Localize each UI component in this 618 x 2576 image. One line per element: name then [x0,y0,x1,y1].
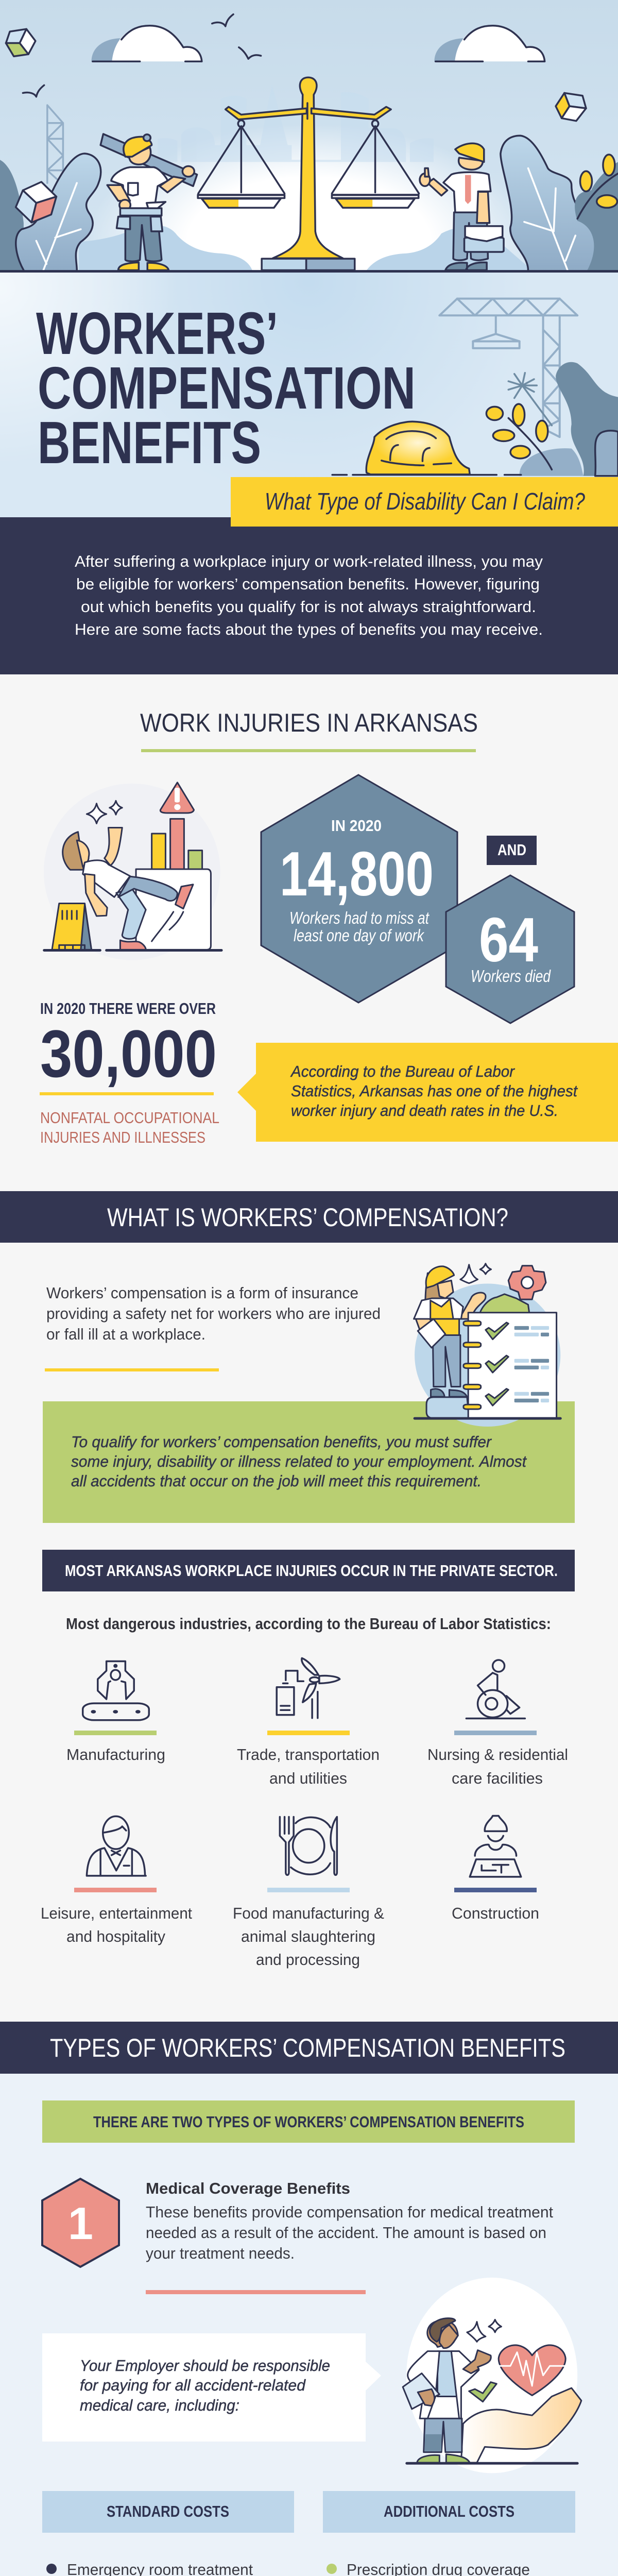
callout: employer responsibility: medical care, including: [80,2396,239,2414]
title: WORKERS’ [36,300,278,367]
definition paragraph: or fall ill at a workplace. [46,1325,205,1343]
green banner: two types [42,2100,575,2143]
green qualification box: some injury, disability or illness related to your employment. Almost [71,1452,527,1470]
green qualification box: all accidents that occur on the job will meet this requirement. [71,1472,482,1490]
stat hexagon: 14,800: 14,800 [280,839,434,909]
hero illustration: scales of justice and workers [0,0,618,361]
industry: leisure, entertainment and hospitality [41,1816,192,1945]
subtitle banner [231,477,618,527]
intro panel: Here are some facts about the types of benefits you may receive. [75,620,543,638]
section band: types of benefits [0,2022,618,2074]
industry: food manufacturing [233,1817,384,1969]
badge 1 [42,2179,119,2267]
heading: work injuries in Arkansas: WORK INJURIES IN ARKANSAS [140,708,478,737]
stat: 30,000 injuries and illnesses: 30,000 [40,1016,217,1091]
text: medical coverage benefits: These benefits provide compensation for medical treatment [146,2203,553,2221]
industry: nursing and residential care [427,1660,568,1787]
text: medical coverage benefits [146,2179,553,2294]
intro panel: out which benefits you qualify for is not always straightforward. [81,598,536,616]
industry: nursing and residential care: care facilities [452,1769,543,1787]
industry: manufacturing: Manufacturing [66,1745,165,1764]
callout: employer responsibility [42,2333,381,2442]
title [36,300,416,476]
industry: leisure, entertainment and hospitality: Leisure, entertainment [41,1904,192,1922]
icon: engineer with blueprint [470,1816,521,1877]
AND badge [487,836,537,865]
intro panel: After suffering a workplace injury or work-related illness, you may [75,552,543,570]
text: medical coverage benefits: Medical Coverage Benefits [146,2179,350,2197]
stat: 30,000 injuries and illnesses: INJURIES AND ILLNESSES [40,1128,205,1146]
callout: employer responsibility: Your Employer should be responsible [80,2357,330,2375]
title: BENEFITS [38,409,261,476]
industry: trade, transportation and utilities [237,1658,380,1787]
industry: trade, transportation and utilities: Trade, transportation [237,1745,380,1764]
stat hexagon: 14,800: least one day of work [294,926,424,945]
callout: Bureau of Labor Statistics: Statistics, Arkansas has one of the highest [291,1082,578,1100]
definition paragraph: Workers’ compensation is a form of insurance [46,1284,358,1302]
intro panel: be eligible for workers’ compensation benefits. However, figuring [76,575,540,593]
stat hexagon: 64: Workers died [471,967,551,986]
illustration: worker with checklist [414,1264,560,1427]
stat hexagon: 14,800 [261,775,457,1003]
stat: 30,000 injuries and illnesses: IN 2020 THERE WERE OVER [40,999,216,1018]
callout: employer responsibility: for paying for all accident-related [80,2376,306,2394]
heading: work injuries in Arkansas [140,708,478,752]
industry: food manufacturing: Food manufacturing & [233,1904,384,1922]
icon: robotic claw on conveyor [83,1661,149,1720]
icon: plate, fork and knife [280,1817,337,1875]
panel: standard costs: STANDARD COSTS [107,2502,229,2520]
illustration: doctor with heart and hand [403,2278,581,2473]
industry: nursing and residential care: Nursing & residential [427,1745,568,1764]
under-ground title background with crane, helmet and plants [0,273,618,518]
industry: trade, transportation and utilities: and utilities [269,1769,347,1787]
stat: 30,000 injuries and illnesses: NONFATAL OCCUPATIONAL [40,1109,219,1127]
industry: leisure, entertainment and hospitality: and hospitality [66,1927,165,1945]
callout: Bureau of Labor Statistics [237,1043,618,1142]
illustration: falling worker [44,783,221,960]
industry: construction: Construction [452,1904,539,1922]
stat hexagon: 14,800: Workers had to miss at [289,908,430,927]
green qualification box [43,1401,575,1523]
subheading: most dangerous industries: Most dangerous industries, according to the Bureau of Labor Statistics: [66,1615,551,1633]
callout: Bureau of Labor Statistics: worker injury and death rates in the U.S. [291,1101,558,1120]
badge 1: 1 [68,2198,93,2249]
section background: medical benefits [0,2073,618,2576]
industry: manufacturing [66,1661,165,1764]
stat: 30,000 injuries and illnesses [40,999,219,1146]
industry: food manufacturing: animal slaughtering [241,1927,375,1945]
panel: standard costs [42,2491,294,2576]
green qualification box: To qualify for workers’ compensation benefits, you must suffer [71,1433,492,1451]
stat hexagon: 64 [446,875,574,1023]
definition paragraph: providing a safety net for workers who are injured [46,1304,381,1323]
stat hexagon: 64: 64 [479,905,538,975]
intro panel [0,517,618,674]
title: COMPENSATION [38,354,416,421]
stat hexagon: 14,800: IN 2020 [331,817,382,835]
industry: food manufacturing: and processing [256,1951,360,1969]
panel: additional costs [323,2491,575,2576]
AND badge: AND [497,841,526,859]
callout: Bureau of Labor Statistics: According to the Bureau of Labor [290,1062,516,1080]
icon: wind turbine and battery [277,1658,340,1718]
icon: wheelchair user [466,1660,525,1719]
industry: construction [452,1816,539,1922]
banner: private sector [42,1550,575,1591]
definition paragraph [45,1284,381,1371]
green banner: two types: THERE ARE TWO TYPES OF WORKERS’ COMPENSATION BENEFITS [93,2113,524,2131]
text: medical coverage benefits: needed as a result of the accident. The amount is based on [146,2224,546,2242]
icon: waiter with bow tie [87,1816,146,1876]
text: medical coverage benefits: your treatment needs. [146,2244,295,2262]
section band: what is workers' compensation [0,1191,618,1243]
panel: additional costs: ADDITIONAL COSTS [384,2502,514,2520]
section band: what is workers' compensation: WHAT IS WORKERS’ COMPENSATION? [107,1203,508,1232]
